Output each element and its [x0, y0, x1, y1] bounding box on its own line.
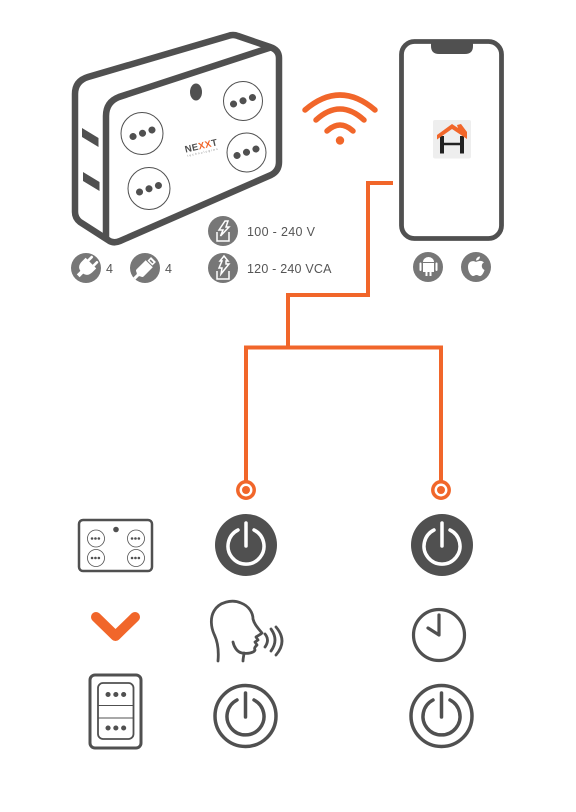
brand logo: NEXXT: [184, 137, 219, 156]
connector node right: [433, 482, 449, 498]
LED: [190, 84, 202, 100]
icon: plug: [71, 253, 101, 283]
icon: usb: [130, 253, 160, 283]
icon: wifi: [305, 95, 375, 145]
icon: power filled left: [215, 514, 277, 576]
icon: small power strip: [79, 520, 152, 571]
icon: power filled right: [411, 514, 473, 576]
socket 4: [227, 133, 266, 172]
icon: apple: [461, 252, 491, 282]
socket 1: [121, 112, 163, 154]
icon: orange chevron: [96, 617, 135, 636]
icon: power outline right: [411, 686, 472, 746]
phone notch: [431, 42, 473, 54]
usb count: 4: [165, 262, 172, 276]
icon: clock: [414, 610, 464, 660]
icon: output voltage: [208, 253, 238, 283]
icon: android: [413, 252, 443, 282]
icon: wall outlet: [90, 675, 141, 748]
phone body: [402, 42, 502, 238]
icon: input voltage: [208, 216, 238, 246]
socket 3: [224, 82, 262, 120]
side slots: [82, 128, 100, 191]
input voltage label: 100 - 240 V: [247, 225, 316, 239]
plug count: 4: [106, 262, 113, 276]
app icon: [433, 120, 471, 158]
socket 2: [128, 168, 170, 210]
device body outline: [75, 35, 279, 242]
icon: voice command head: [211, 601, 282, 661]
icon: power outline left: [215, 686, 276, 746]
power strip device: [75, 35, 279, 242]
connector node left: [238, 482, 254, 498]
device front panel edge: [106, 47, 272, 238]
connector lines: [246, 183, 441, 482]
smartphone: [402, 42, 502, 238]
output voltage label: 120 - 240 VCA: [247, 262, 332, 276]
brand logo: technologies: [187, 147, 219, 158]
